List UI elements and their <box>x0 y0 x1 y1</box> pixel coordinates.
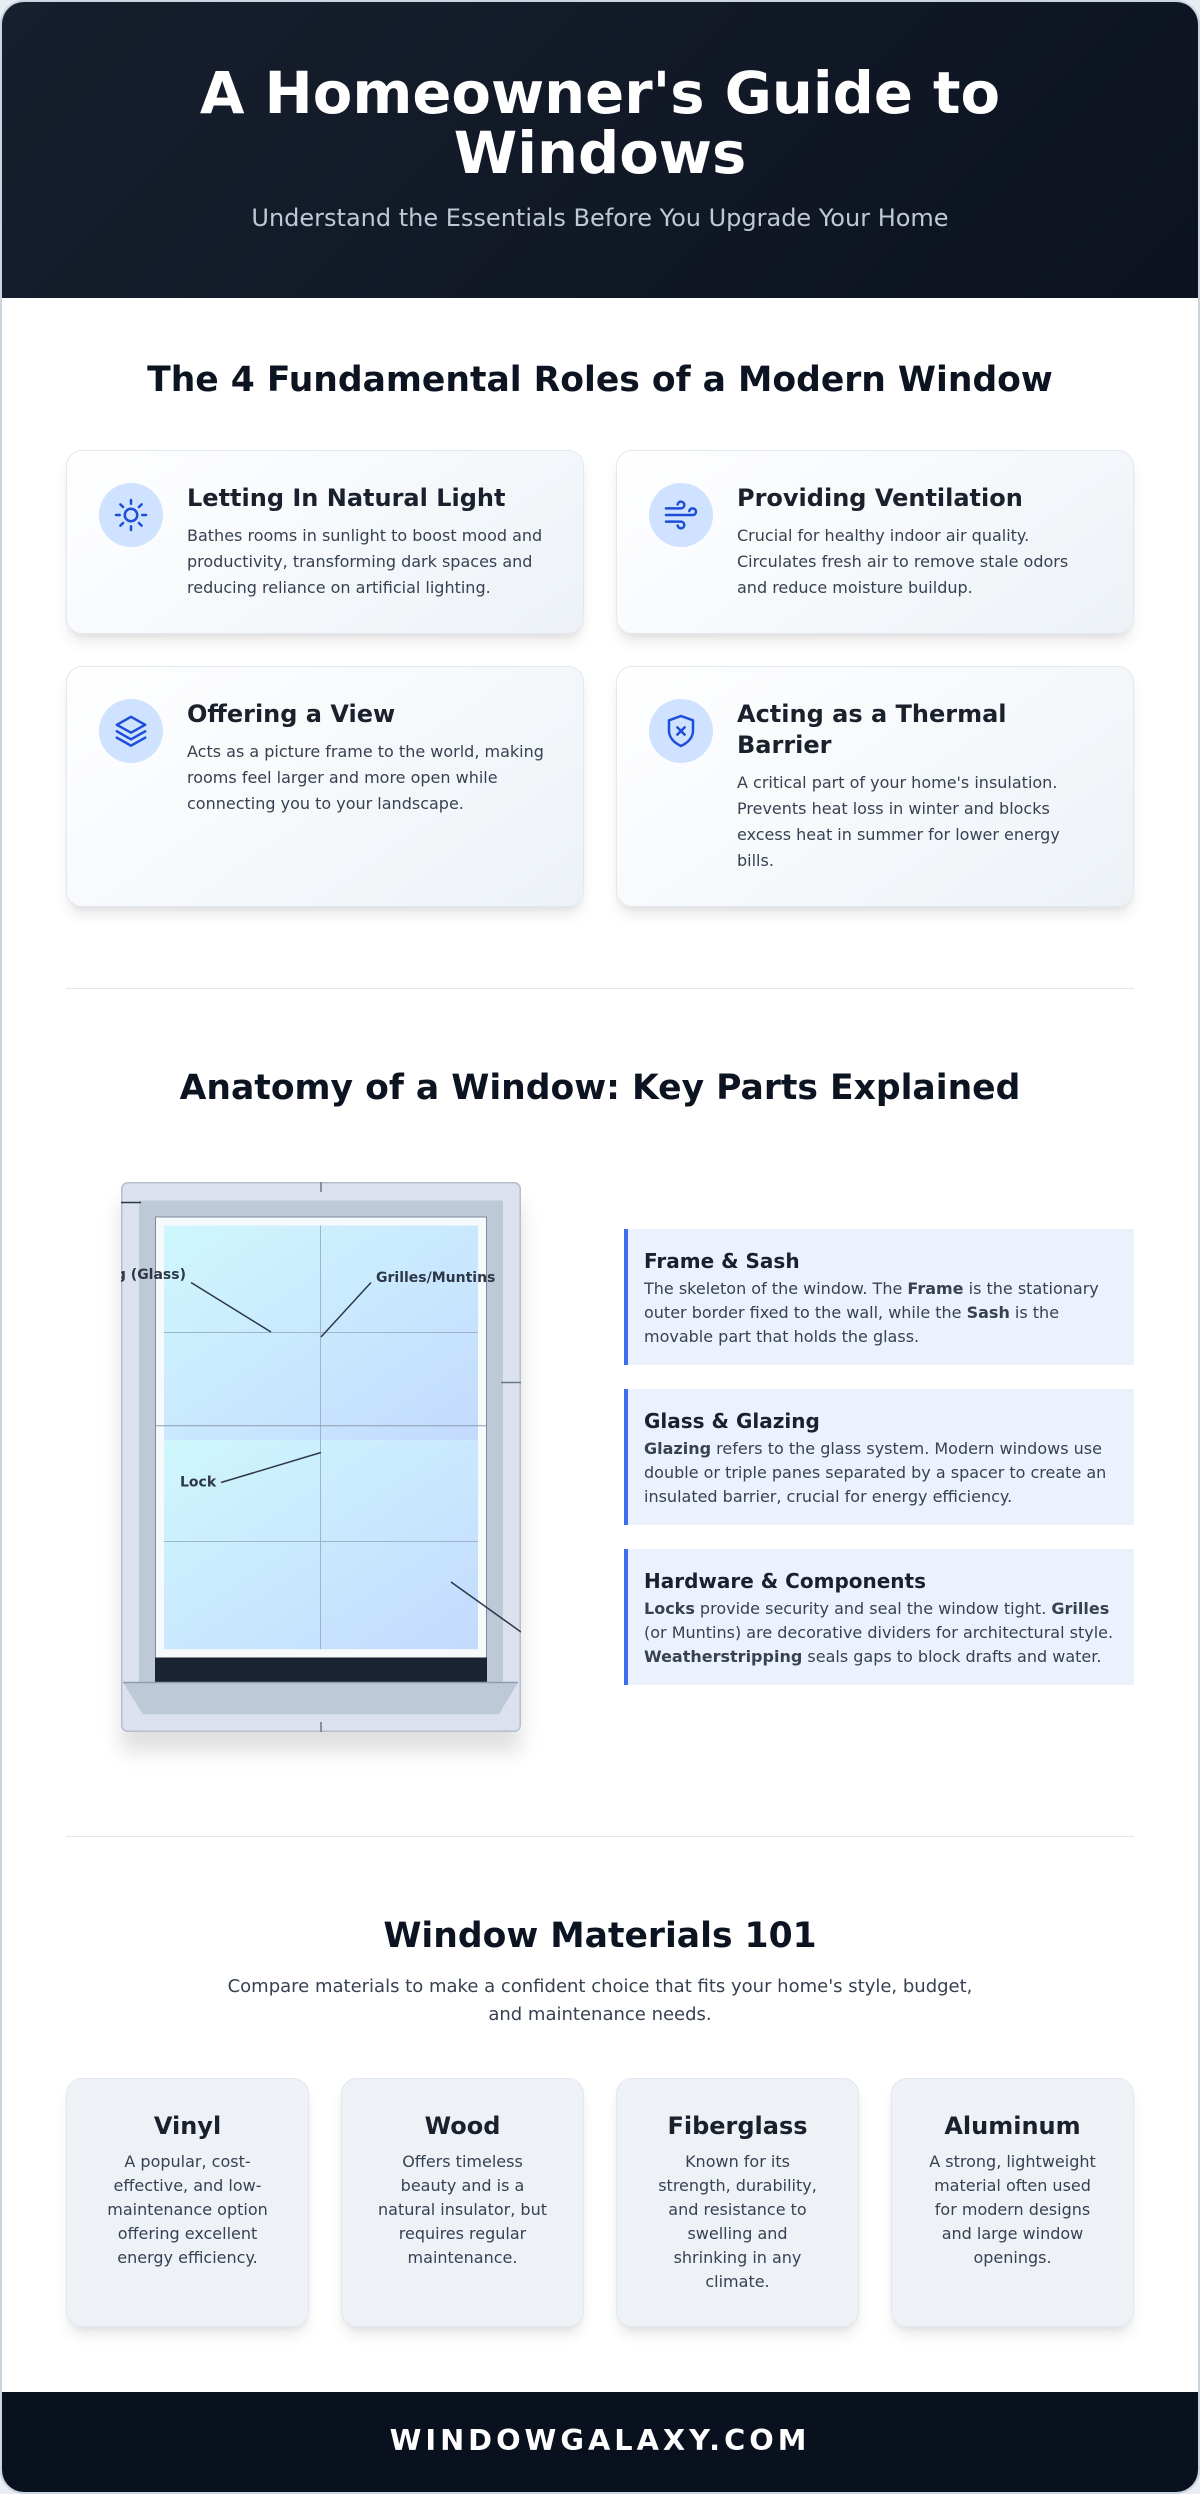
header banner <box>0 0 1200 298</box>
bottom rail <box>155 1657 487 1682</box>
icon: shield <box>649 699 713 763</box>
text: natural light: Letting In Natural Light <box>187 484 505 512</box>
detail: glass and glazing: Glass & Glazing <box>644 1409 820 1433</box>
detail: hardware: Weatherstripping seals gaps to block drafts and water. <box>644 1647 1101 1666</box>
tick marks <box>321 1182 521 1732</box>
card: thermal barrier <box>616 666 1134 907</box>
title: A Homeowner's Guide to Windows <box>200 60 1000 187</box>
leader lines <box>191 1282 521 1632</box>
frame <box>139 1200 503 1682</box>
label: glazing: Glazing (Glass) <box>67 1266 186 1282</box>
tick: top-left <box>121 1201 141 1203</box>
footer <box>0 2392 1200 2494</box>
detail: hardware: Locks provide security and seal the window tight. Grilles <box>644 1599 1109 1618</box>
detail: glass and glazing: insulated barrier, crucial for energy efficiency. <box>644 1487 1012 1506</box>
text: ventilation <box>737 484 1068 597</box>
text: thermal barrier <box>737 700 1060 870</box>
material: aluminum <box>891 2078 1134 2327</box>
material: wood: Offers timeless beauty and is a natural insulator, but requires regular maintenance. <box>378 2152 547 2267</box>
card: ventilation <box>616 450 1134 634</box>
material: fiberglass: Known for its strength, durability, and resistance to swelling and shrinking in any climate. <box>658 2152 817 2291</box>
detail: glass and glazing: Glazing refers to the glass system. Modern windows use <box>644 1439 1102 1458</box>
text: natural light: Bathes rooms in sunlight to boost mood and productivity, transforming dark spaces and reducing reliance on artificial lighting. <box>187 526 542 597</box>
subtitle: Understand the Essentials Before You Upgrade Your Home <box>251 204 949 232</box>
glass upper <box>164 1225 478 1440</box>
material: vinyl <box>66 2078 309 2327</box>
icon: sun <box>99 483 163 547</box>
window diagram <box>115 1182 527 1758</box>
card: natural light <box>66 450 584 634</box>
text: view: Offering a View <box>187 700 395 728</box>
wall outer frame <box>122 1182 520 1731</box>
grille lines <box>164 1225 478 1649</box>
heading: fundamental roles: The 4 Fundamental Roles of a Modern Window <box>147 360 1053 400</box>
sill <box>123 1682 518 1714</box>
material: aluminum: A strong, lightweight material often used for modern designs and large window openings. <box>929 2152 1096 2267</box>
heading: materials: Window Materials 101 <box>383 1916 817 1956</box>
detail: frame and sash: outer border fixed to the wall, while the Sash is the <box>644 1303 1059 1322</box>
detail: glass and glazing <box>624 1389 1134 1525</box>
material: vinyl: A popular, cost-effective, and low-maintenance option offering excellent energy efficiency. <box>107 2152 268 2267</box>
detail: frame and sash: Frame & Sash <box>644 1249 800 1273</box>
material: wood <box>341 2078 584 2327</box>
meeting rail <box>156 1425 486 1426</box>
detail: glass and glazing: double or triple panes separated by a spacer to create an <box>644 1463 1106 1482</box>
card: view <box>66 666 584 907</box>
text: thermal barrier: Acting as a Thermal Barrier <box>737 700 1007 759</box>
sash <box>156 1216 486 1658</box>
detail: frame and sash <box>624 1229 1134 1365</box>
label: lock: Lock <box>180 1474 217 1490</box>
material: wood: Wood <box>425 2112 500 2140</box>
footer: WINDOWGALAXY.COM <box>390 2423 810 2457</box>
material: fiberglass: Fiberglass <box>667 2112 808 2140</box>
icon: wind <box>649 483 713 547</box>
material: fiberglass <box>616 2078 859 2327</box>
heading: anatomy: Anatomy of a Window: Key Parts Explained <box>180 1068 1020 1108</box>
material: vinyl: Vinyl <box>154 2112 221 2140</box>
material: aluminum: Aluminum <box>944 2112 1081 2140</box>
text: thermal barrier: A critical part of your home's insulation. Prevents heat loss in winter and blocks excess heat in summer for lower energy bills. <box>737 773 1060 870</box>
detail: frame and sash: movable part that holds the glass. <box>644 1327 919 1346</box>
detail: hardware: Hardware & Components <box>644 1569 926 1593</box>
text: natural light <box>187 484 542 597</box>
materials intro: Compare materials to make a confident choice that fits your home's style, budget, and maintenance needs. <box>228 1976 972 2025</box>
detail: frame and sash: The skeleton of the window. The Frame is the stationary <box>644 1279 1099 1298</box>
glass lower <box>164 1440 478 1649</box>
detail: hardware: (or Muntins) are decorative dividers for architectural style. <box>644 1623 1113 1642</box>
text: ventilation: Providing Ventilation <box>737 484 1023 512</box>
text: view: Acts as a picture frame to the world, making rooms feel larger and more open while connecting you to your landscape. <box>187 742 544 813</box>
detail: hardware <box>624 1549 1134 1685</box>
label: grilles: Grilles/Muntins <box>376 1269 495 1285</box>
text: ventilation: Crucial for healthy indoor air quality. Circulates fresh air to remove stale odors and reduce moisture buildup. <box>737 526 1068 597</box>
text: view <box>187 700 544 813</box>
icon: layers <box>99 699 163 763</box>
